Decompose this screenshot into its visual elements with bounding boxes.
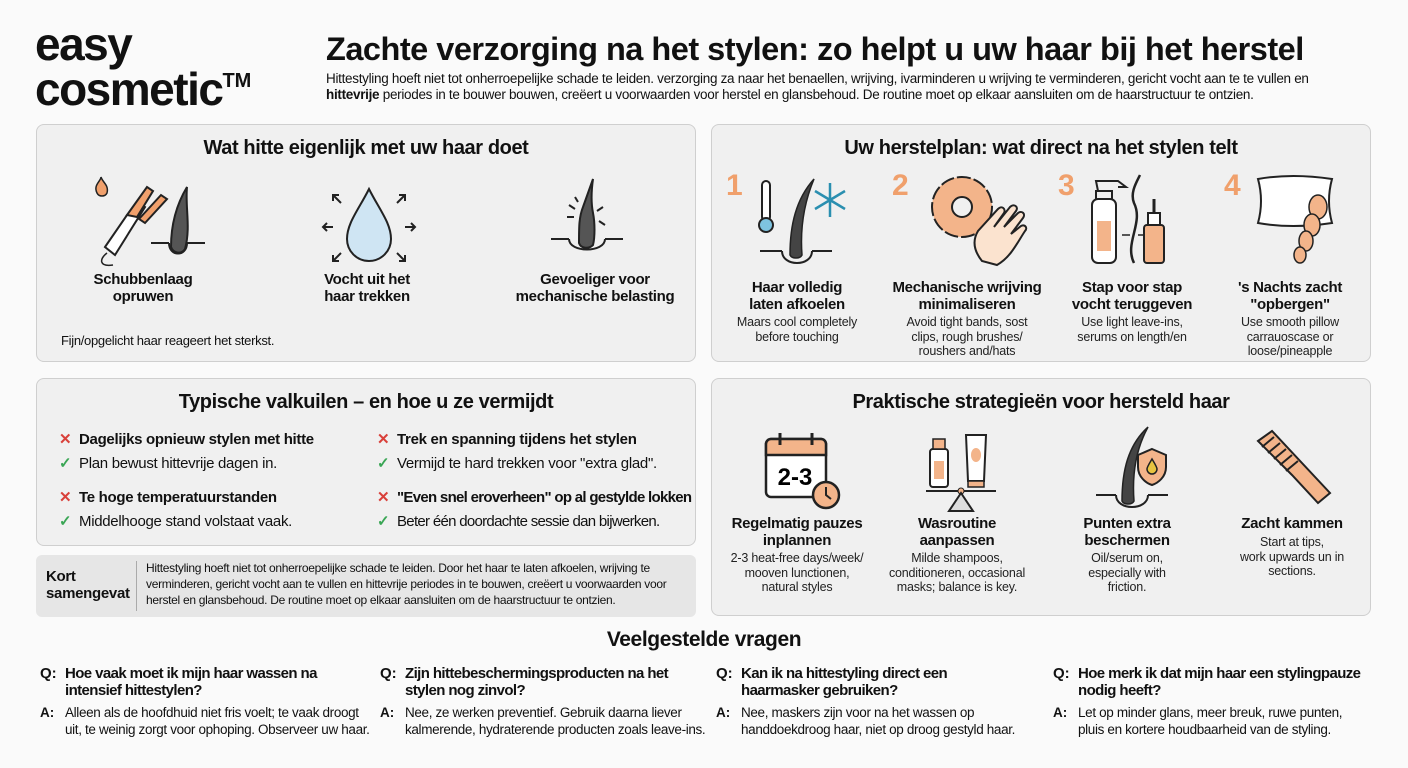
strategy 4: work upwards un in — [1240, 550, 1344, 564]
step 3 — [1058, 169, 1192, 344]
logo: easy — [35, 18, 131, 70]
summary label: samengevat — [46, 585, 130, 602]
pitfall 1: Dagelijks opnieuw stylen met hitte — [79, 431, 314, 448]
pitfall 1 — [59, 431, 314, 472]
step 1: Haar volledig — [752, 279, 842, 296]
label: scales: Schubbenlaag — [94, 271, 192, 288]
strategy 3: Oil/serum on, — [1091, 551, 1163, 565]
step 2: Mechanische wrijving — [892, 279, 1042, 296]
FAQ 1: Alleen als de hoofdhuid niet fris voelt; te vaak droogt — [65, 705, 359, 720]
strategy 2: Milde shampoos, — [911, 551, 1003, 565]
FAQ 3: A: — [716, 705, 730, 720]
summary label: Kort — [46, 568, 76, 585]
step 2: Avoid tight bands, sost — [907, 315, 1027, 329]
pitfall 4: ✕ — [377, 489, 389, 506]
FAQ 2: Q: — [380, 665, 397, 682]
pitfall 4: Beter één doordachte sessie dan bijwerken. — [397, 513, 659, 530]
summary text — [146, 561, 667, 607]
FAQ 3: Q: — [716, 665, 733, 682]
panel: what heat does — [36, 124, 696, 362]
summary text: herstel en glansbehoud. De routine moet op elkaar aansluiten om de haarstructuur te ontzien. — [146, 593, 615, 607]
FAQ 4 — [1053, 665, 1360, 737]
pitfall 2: ✓ — [377, 455, 389, 472]
FAQ 1: uit, te weinig zorgt voor ophoping. Observeer uw haar. — [65, 722, 370, 736]
step 2: minimaliseren — [918, 296, 1015, 313]
label: mechanical: Gevoeliger voor — [540, 271, 650, 288]
step 1 — [726, 169, 858, 344]
panel: pitfalls — [36, 378, 696, 546]
panel: strategies — [711, 378, 1371, 616]
FAQ 2: Nee, ze werken preventief. Gebruik daarna liever — [405, 705, 682, 720]
strategy 1: 2-3 heat-free days/week/ — [731, 551, 863, 565]
step 2: roushers and/hats — [919, 344, 1015, 358]
strategy 3 — [1083, 426, 1172, 594]
step 3: serums on length/en — [1077, 330, 1187, 344]
logo: cosmeticTM — [35, 63, 251, 115]
FAQ 2 — [380, 665, 705, 737]
strategy 3: beschermen — [1084, 532, 1170, 549]
FAQ 4: nodig heeft? — [1078, 682, 1161, 699]
icon: spray and serum — [1091, 174, 1165, 264]
FAQ 2: Zijn hittebeschermingsproducten na het — [405, 665, 668, 682]
icon: balance with products — [926, 434, 996, 512]
step 1: 1 — [726, 169, 743, 202]
label: mechanical: mechanische belasting — [516, 288, 674, 305]
pitfall 1: Plan bewust hittevrije dagen in. — [79, 455, 277, 472]
pitfall 3: Middelhooge stand volstaat vaak. — [79, 513, 292, 530]
step 1: before touching — [755, 330, 839, 344]
title: Zachte verzorging na het stylen: zo helpt u uw haar bij het herstel — [326, 31, 1304, 67]
FAQ 3: handdoekdroog haar, niet op droog gestyld haar. — [741, 722, 1015, 736]
step 3: 3 — [1058, 169, 1075, 202]
summary box — [36, 555, 696, 617]
strategy 4: sections. — [1268, 564, 1316, 578]
label: mechanical — [516, 271, 674, 305]
FAQ 1: A: — [40, 705, 54, 720]
FAQ 2: stylen nog zinvol? — [405, 682, 525, 699]
strategy 3: especially with — [1088, 566, 1166, 580]
FAQ 3: Kan ik na hittestyling direct een — [741, 665, 947, 682]
pitfall 1: ✓ — [59, 455, 71, 472]
pitfall 4: ✓ — [377, 513, 389, 530]
pitfall 2 — [377, 431, 657, 472]
summary label — [46, 568, 130, 602]
FAQ 4: A: — [1053, 705, 1067, 720]
FAQ 4: Hoe merk ik dat mijn haar een stylingpauze — [1078, 665, 1360, 682]
FAQ 3 — [716, 665, 1015, 737]
strategy 2 — [889, 434, 1025, 594]
FAQ 4: pluis en kortere houdbaarheid van de styling. — [1078, 722, 1331, 736]
pitfall 4: "Even snel eroverheen" op al gestylde lokken — [397, 489, 691, 506]
icon: calendar — [764, 433, 840, 510]
FAQ 4: Q: — [1053, 665, 1070, 682]
FAQ 4: Let op minder glans, meer breuk, ruwe punten, — [1078, 705, 1342, 720]
FAQ 2: A: — [380, 705, 394, 720]
strategy 4 — [1240, 430, 1344, 578]
FAQ 1: intensief hittestylen? — [65, 682, 202, 699]
step 3: Use light leave-ins, — [1081, 315, 1183, 329]
step 4: carrauoscase or — [1247, 330, 1333, 344]
step 4: "opbergen" — [1250, 296, 1330, 313]
heading: Typische valkuilen – en hoe u ze vermijdt — [179, 391, 553, 413]
strategy 1: inplannen — [763, 532, 831, 549]
icon: broken hair — [551, 178, 623, 250]
FAQ 2: kalmerende, hydraterende producten zoals leave-ins. — [405, 722, 705, 736]
strategy 3: Punten extra — [1083, 515, 1171, 532]
FAQ 1: Hoe vaak moet ik mijn haar wassen na — [65, 665, 317, 682]
step 3: vocht teruggeven — [1072, 296, 1192, 313]
strategy 2: masks; balance is key. — [897, 580, 1017, 594]
heading: Wat hitte eigenlijk met uw haar doet — [204, 137, 528, 159]
icon: scrunchie and hand — [931, 176, 1028, 266]
footnote: Fijn/opgelicht haar reageert het sterkst. — [61, 333, 274, 348]
step 4: 's Nachts zacht — [1238, 279, 1342, 296]
icon: hair with shield — [1096, 426, 1168, 508]
pitfall 3: ✕ — [59, 489, 71, 506]
FAQ 3: Nee, maskers zijn voor na het wassen op — [741, 705, 974, 720]
step 4: 4 — [1224, 169, 1241, 202]
panel: recovery plan — [711, 124, 1371, 362]
strategy 3: friction. — [1108, 580, 1146, 594]
pitfall 4 — [377, 489, 692, 530]
icon: pillow and braid — [1256, 175, 1334, 264]
FAQ 1 — [40, 665, 370, 737]
strategy 1: mooven lunctionen, — [745, 566, 849, 580]
subtitle: hittevrije periodes in te bouwer bouwen, creëert u voorwaarden voor herstel en glansbehoud. De routine moet op elkaar aansluiten om de haarstructuur te ontzien. — [326, 87, 1254, 102]
strategy 4: Start at tips, — [1260, 535, 1324, 549]
FAQ 3: haarmasker gebruiken? — [741, 682, 898, 699]
subtitle: Hittestyling hoeft niet tot onherroepelijke schade te leiden. verzorging za naar het benaellen, wrijving, ivarminderen u wrijving te verminderen, gericht vocht aan te te vullen en — [326, 71, 1309, 86]
FAQ heading: Veelgestelde vragen — [607, 628, 801, 651]
FAQ 1: Q: — [40, 665, 57, 682]
pitfall 2: Trek en spanning tijdens het stylen — [397, 431, 637, 448]
heading: Praktische strategieën voor hersteld haar — [852, 391, 1230, 413]
label: moisture: Vocht uit het — [324, 271, 410, 288]
icon: cooling — [758, 178, 846, 264]
logo — [35, 18, 251, 115]
strategy 1 — [731, 433, 864, 594]
strategy 2: conditioneren, occasional — [889, 566, 1025, 580]
step 2: 2 — [892, 169, 909, 202]
pitfall 3: Te hoge temperatuurstanden — [79, 489, 277, 506]
label: moisture: haar trekken — [324, 288, 410, 305]
label: scales: opruwen — [113, 288, 173, 305]
icon: water drop — [322, 186, 416, 262]
label: scales — [94, 271, 192, 305]
label: moisture — [324, 271, 410, 305]
strategy 1: natural styles — [762, 580, 832, 594]
icon: comb — [1256, 430, 1332, 504]
strategy 2: Wasroutine — [918, 515, 996, 532]
pitfall 3 — [59, 489, 292, 530]
pitfall 3: ✓ — [59, 513, 71, 530]
step 4: loose/pineapple — [1248, 344, 1332, 358]
summary text: Hittestyling hoeft niet tot onherroepelijke schade te leiden. Door het haar te laten afkoelen, wrijving te — [146, 561, 650, 575]
icon: calendar: 2-3 — [778, 464, 812, 491]
heading: Uw herstelplan: wat direct na het stylen telt — [844, 137, 1238, 159]
pitfall 1: ✕ — [59, 431, 71, 448]
strategy 4: Zacht kammen — [1241, 515, 1343, 532]
step 3: Stap voor stap — [1082, 279, 1182, 296]
strategy 2: aanpassen — [920, 532, 994, 549]
step 1: Maars cool completely — [737, 315, 857, 329]
step 4 — [1224, 169, 1342, 358]
step 4: Use smooth pillow — [1241, 315, 1339, 329]
step 2: clips, rough brushes/ — [911, 330, 1023, 344]
subtitle — [326, 71, 1309, 102]
step 2 — [892, 169, 1042, 358]
pitfall 2: Vermijd te hard trekken voor "extra glad". — [397, 455, 657, 472]
strategy 1: Regelmatig pauzes — [732, 515, 862, 532]
step 1: laten afkoelen — [749, 296, 845, 313]
icon: flat iron and damaged hair — [95, 176, 205, 266]
pitfall 2: ✕ — [377, 431, 389, 448]
summary text: verminderen, gericht vocht aan te vullen en hittevrije periodes in te bouwen, creëert u voorwaarden voor — [146, 577, 666, 591]
